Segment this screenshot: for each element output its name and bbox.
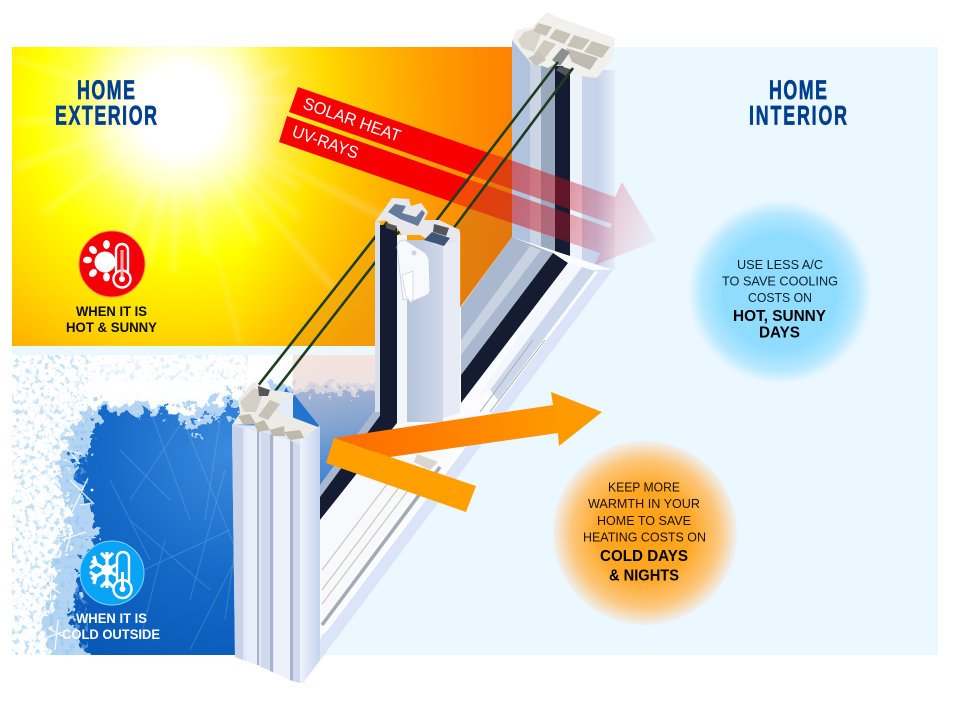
glass pane tint: left sash	[293, 222, 387, 485]
sash roller	[414, 454, 438, 470]
glass pane tint: right sash	[450, 150, 512, 307]
heading: home exterior: EXTERIOR	[55, 100, 157, 130]
callout: heating savings	[553, 441, 737, 625]
window lock handle	[397, 240, 430, 303]
caption: when it is cold outside	[62, 610, 160, 642]
arrow shaft and head	[334, 392, 602, 457]
heading: home interior: HOME	[769, 74, 827, 105]
caption: when it is cold outside: WHEN IT IS	[76, 610, 147, 626]
window frame: sill diagonal	[303, 237, 613, 683]
front cross-section	[232, 382, 318, 440]
window frame: back profile cross-section	[512, 12, 615, 78]
caption: when it is hot and sunny: HOT & SUNNY	[66, 319, 158, 335]
window frame: centre mullion	[375, 198, 460, 470]
heading: home interior: INTERIOR	[749, 100, 847, 130]
faded arrow passing through the window	[468, 158, 657, 265]
uv-rays band	[279, 116, 470, 202]
callout: cooling savings: COSTS ON	[748, 290, 812, 305]
arrow tail	[326, 438, 476, 512]
callout: heating savings: HEATING COSTS ON	[583, 530, 706, 544]
window frame: front vertical jamb	[232, 382, 320, 683]
callout: cooling savings: TO SAVE COOLING	[722, 274, 838, 288]
callout: cooling savings: USE LESS A/C	[737, 257, 823, 272]
mullion cross-section	[375, 198, 460, 246]
caption: when it is hot and sunny	[66, 303, 158, 335]
label: uv-rays: UV-RAYS	[290, 122, 361, 163]
heading: home exterior: HOME	[77, 74, 135, 105]
heading: home exterior	[55, 74, 157, 130]
panel: sunny exterior	[12, 47, 512, 346]
window frame: back vertical jamb	[512, 40, 615, 275]
heading: home interior	[749, 74, 847, 130]
callout: cooling savings: DAYS	[759, 324, 800, 342]
callout: heating savings: & NIGHTS	[609, 568, 679, 584]
callout: cooling savings	[688, 200, 872, 384]
caption: when it is cold outside: COLD OUTSIDE	[62, 626, 160, 642]
panel: frosty exterior	[12, 355, 375, 655]
band between the two glass panes	[452, 153, 505, 208]
callout: heating savings: COLD DAYS	[600, 548, 688, 565]
label: solar heat: SOLAR HEAT	[301, 94, 403, 146]
glass panes: dark green edges	[257, 62, 573, 395]
callout: cooling savings: HOT, SUNNY	[733, 308, 827, 325]
callout: heating savings: WARMTH IN YOUR	[588, 496, 700, 511]
warmth arrow	[326, 392, 602, 512]
solar heat band	[289, 87, 489, 175]
icon: hot and sunny	[79, 231, 145, 297]
callout: heating savings: KEEP MORE	[608, 480, 680, 494]
callout: heating savings: HOME TO SAVE	[597, 513, 691, 528]
icon: cold outside	[80, 541, 144, 605]
caption: when it is hot and sunny: WHEN IT IS	[76, 303, 147, 319]
solar heat and UV rays arrow	[279, 87, 657, 265]
